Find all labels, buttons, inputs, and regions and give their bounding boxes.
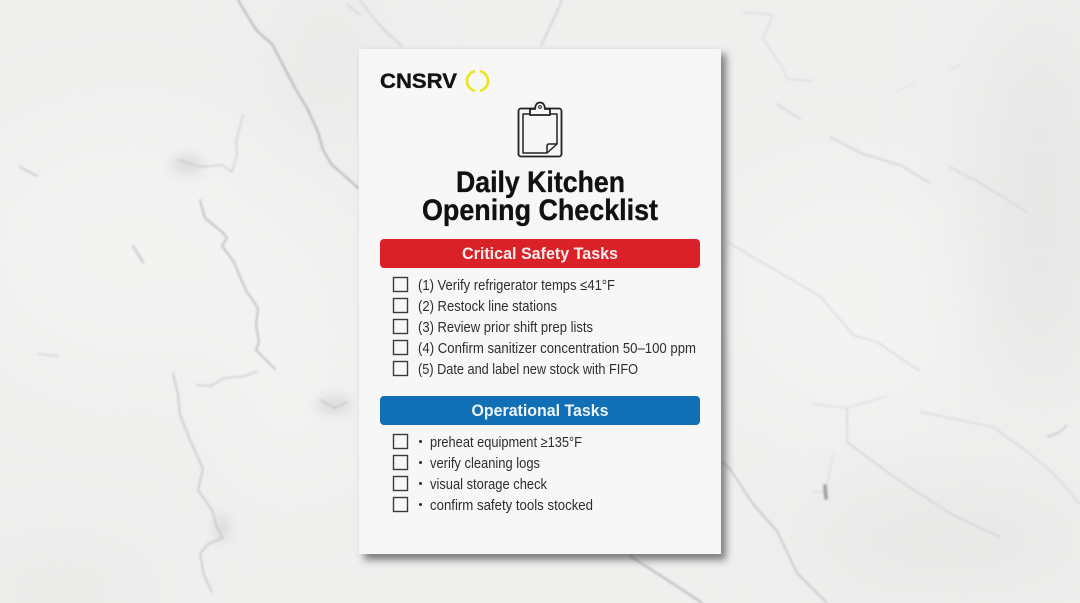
card shadow <box>364 54 726 560</box>
heading: operational tasks: Operational Tasks <box>472 401 608 420</box>
operational task 1: preheat equipment ≥135°F <box>430 435 582 451</box>
task 1: (1) Verify refrigerator temps ≤41°F <box>418 278 615 294</box>
title <box>422 166 658 227</box>
heading: critical safety tasks: Critical Safety Tasks <box>462 244 618 263</box>
operational task 3: visual storage check <box>430 477 548 493</box>
operational task 3 <box>394 476 548 493</box>
title: Daily Kitchen <box>456 166 625 199</box>
panel: operational tasks <box>380 396 700 514</box>
logo <box>380 70 488 93</box>
panel: critical safety tasks <box>380 239 700 378</box>
operational task 2 <box>394 456 540 472</box>
task 4: (4) Confirm sanitizer concentration 50–100 ppm <box>418 341 696 357</box>
task 3: (3) Review prior shift prep lists <box>418 320 593 336</box>
logo wordmark: CNSRV <box>380 70 457 93</box>
task 5: (5) Date and label new stock with FIFO <box>418 362 638 378</box>
heading: critical safety tasks <box>380 239 700 268</box>
operational task 4: confirm safety tools stocked <box>430 498 593 514</box>
icon: clipboard <box>518 102 562 156</box>
task 2: (2) Restock line stations <box>418 299 557 315</box>
operational task 2: verify cleaning logs <box>430 456 540 472</box>
logo ring <box>467 71 488 91</box>
heading: operational tasks <box>380 396 700 425</box>
checklist card <box>359 49 721 554</box>
title: Opening Checklist <box>422 194 658 227</box>
